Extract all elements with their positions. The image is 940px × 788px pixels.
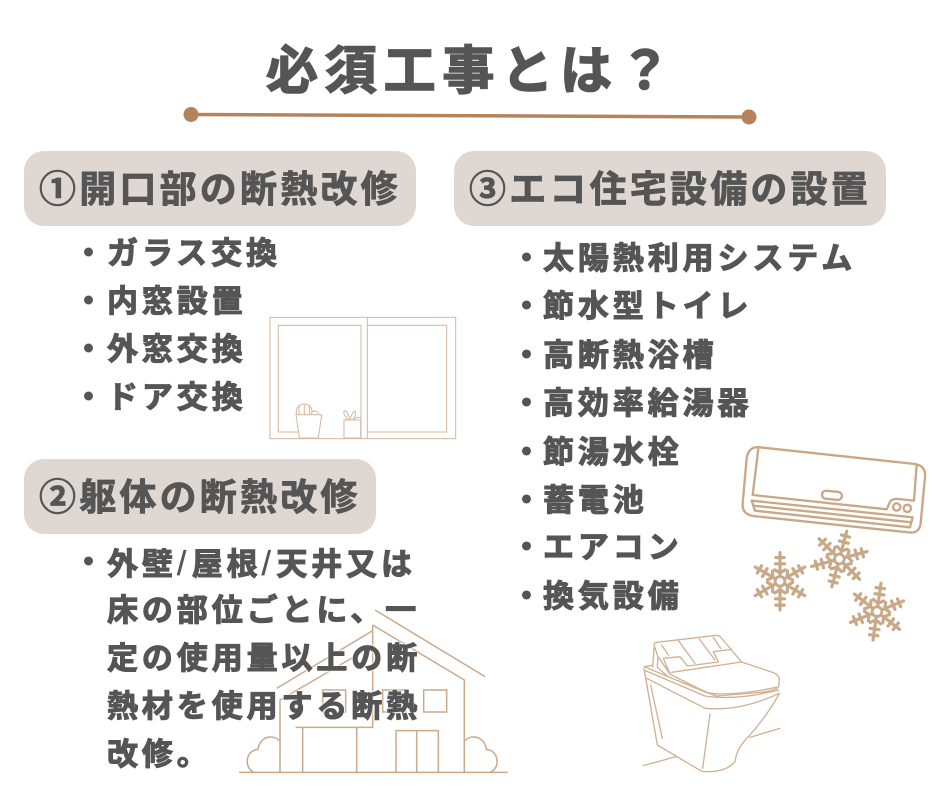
list: opening items: 外窓交換	[107, 332, 247, 367]
text block: body insulation: 熱材を使用する断熱	[107, 689, 421, 724]
text block: body insulation: 改修。	[107, 737, 212, 772]
list: opening items: ・	[73, 284, 108, 319]
list: eco house equipment: ・	[511, 338, 546, 373]
text block: body insulation: 外壁/屋根/天井又は	[107, 545, 416, 583]
list: eco house equipment: 蓄電池	[543, 483, 648, 518]
list: eco house equipment: 高効率給湯器	[543, 386, 752, 421]
list: eco house equipment: ・	[511, 530, 546, 565]
icon: air conditioner	[743, 447, 925, 533]
text block: body insulation: 定の使用量以上の断	[107, 641, 421, 676]
list: opening items: ・	[73, 236, 108, 271]
icon: house	[239, 610, 508, 772]
panel: heading 1	[24, 151, 416, 226]
heading: body insulation: ②躯体の断熱改修	[39, 477, 361, 518]
list: eco house equipment	[511, 241, 856, 614]
icon: snowflakes	[753, 524, 908, 644]
list: eco house equipment: ・	[511, 579, 546, 614]
list: eco house equipment: 換気設備	[543, 579, 683, 614]
list: eco house equipment: ・	[511, 386, 546, 421]
list: eco house equipment: 節湯水栓	[543, 435, 683, 470]
list: eco house equipment: ・	[511, 435, 546, 470]
list: opening items: ・	[73, 380, 108, 415]
heading: eco house equipment: ③エコ住宅設備の設置	[469, 169, 871, 210]
panel: heading 3	[454, 151, 886, 226]
list: opening items: ガラス交換	[107, 236, 281, 271]
text block: body insulation	[73, 545, 421, 772]
list: opening items: ・	[73, 332, 108, 367]
list: eco house equipment: ・	[511, 241, 546, 276]
icon: toilet	[643, 635, 780, 772]
title underline	[184, 107, 756, 124]
list: eco house equipment: 高断熱浴槽	[543, 338, 718, 373]
list: opening items	[73, 236, 281, 415]
list: eco house equipment: 節水型トイレ	[543, 289, 752, 324]
list: opening items: ドア交換	[107, 380, 247, 415]
icon: window with plants	[270, 317, 456, 439]
text block: body insulation: ・	[73, 545, 108, 580]
panel: heading 2	[24, 459, 376, 534]
list: eco house equipment: ・	[511, 289, 546, 324]
list: eco house equipment: 太陽熱利用システム	[543, 241, 856, 276]
heading: opening insulation: ①開口部の断熱改修	[39, 169, 401, 210]
text block: body insulation: 床の部位ごとに、一	[107, 593, 420, 628]
list: eco house equipment: エアコン	[543, 530, 683, 565]
list: eco house equipment: ・	[511, 483, 546, 518]
title: 必須工事とは？	[266, 43, 678, 101]
list: opening items: 内窓設置	[107, 284, 247, 319]
